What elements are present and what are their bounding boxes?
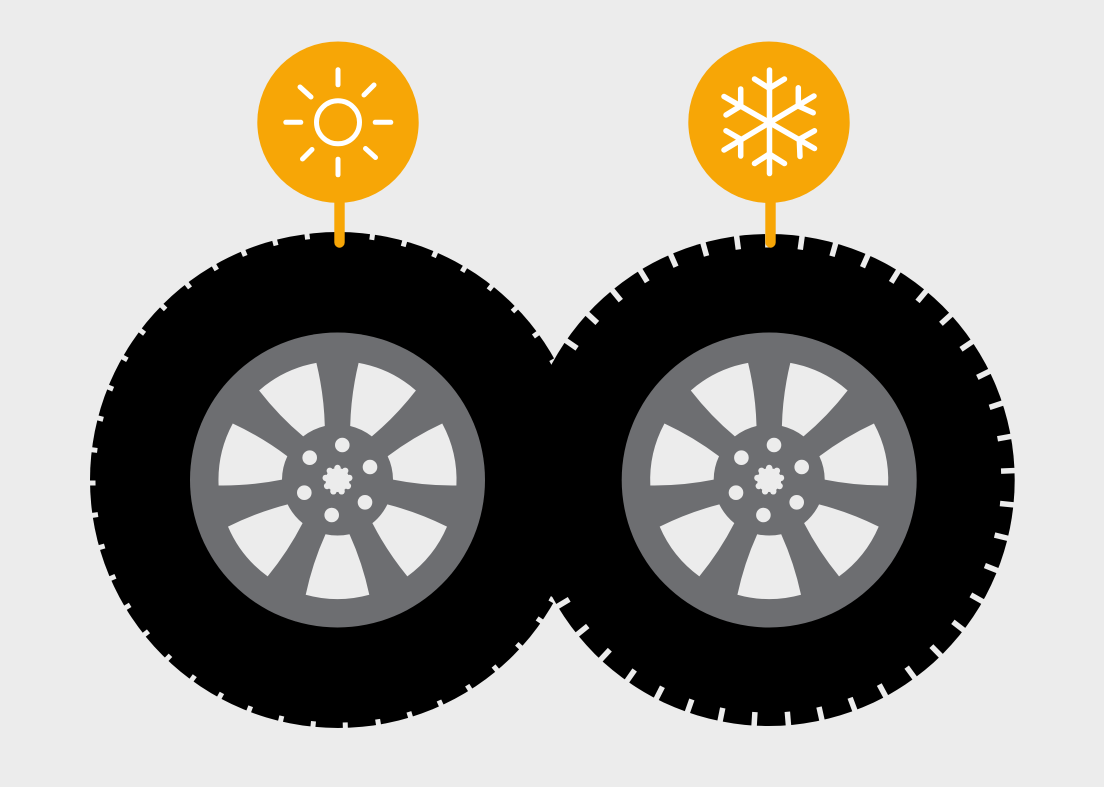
- spoke windows: [646, 359, 892, 599]
- tread notches: winter: [556, 232, 1017, 728]
- icon: snowflake: [724, 70, 814, 174]
- spoke windows: [214, 359, 461, 599]
- tread notches: summer: [89, 231, 556, 729]
- alloy wheel: winter: [622, 332, 917, 628]
- pin circle: [257, 42, 419, 203]
- pin stem: [334, 195, 345, 242]
- tire body: winter: [523, 234, 1015, 726]
- tire body: summer: [90, 232, 586, 728]
- alloy wheel: summer: [190, 332, 485, 628]
- icon: sun: [286, 70, 391, 175]
- wheel disc: [190, 332, 485, 628]
- centre cap: [322, 465, 352, 494]
- winter tire: [523, 232, 1017, 728]
- pin: winter snowflake: [688, 42, 850, 242]
- wheel disc: [622, 332, 917, 628]
- centre cap: [754, 465, 784, 494]
- summer tire: [89, 231, 586, 729]
- pin stem: [765, 195, 776, 242]
- pin: summer sun: [257, 42, 419, 242]
- bolt holes: [729, 438, 809, 522]
- pin circle: [688, 42, 850, 203]
- bolt holes: [297, 438, 377, 522]
